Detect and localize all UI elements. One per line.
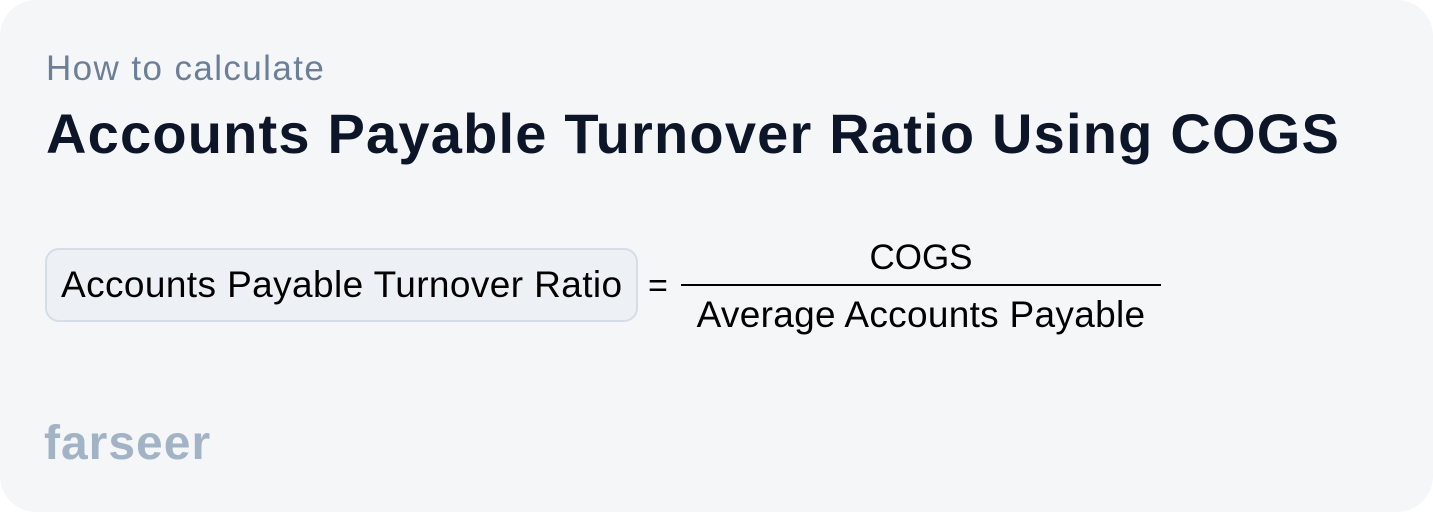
numerator: COGS bbox=[869, 238, 973, 277]
logo: farseer: farseer bbox=[44, 417, 211, 470]
equals sign: = bbox=[648, 267, 668, 305]
subtitle: How to calculate bbox=[46, 49, 325, 88]
formula box: left side: Accounts Payable Turnover Ratio bbox=[61, 264, 623, 305]
fraction bbox=[681, 238, 1161, 335]
denominator: Average Accounts Payable bbox=[697, 294, 1145, 335]
fraction line bbox=[681, 284, 1161, 286]
title: Accounts Payable Turnover Ratio Using COGS bbox=[46, 102, 1340, 165]
formula box: left side bbox=[45, 248, 638, 322]
